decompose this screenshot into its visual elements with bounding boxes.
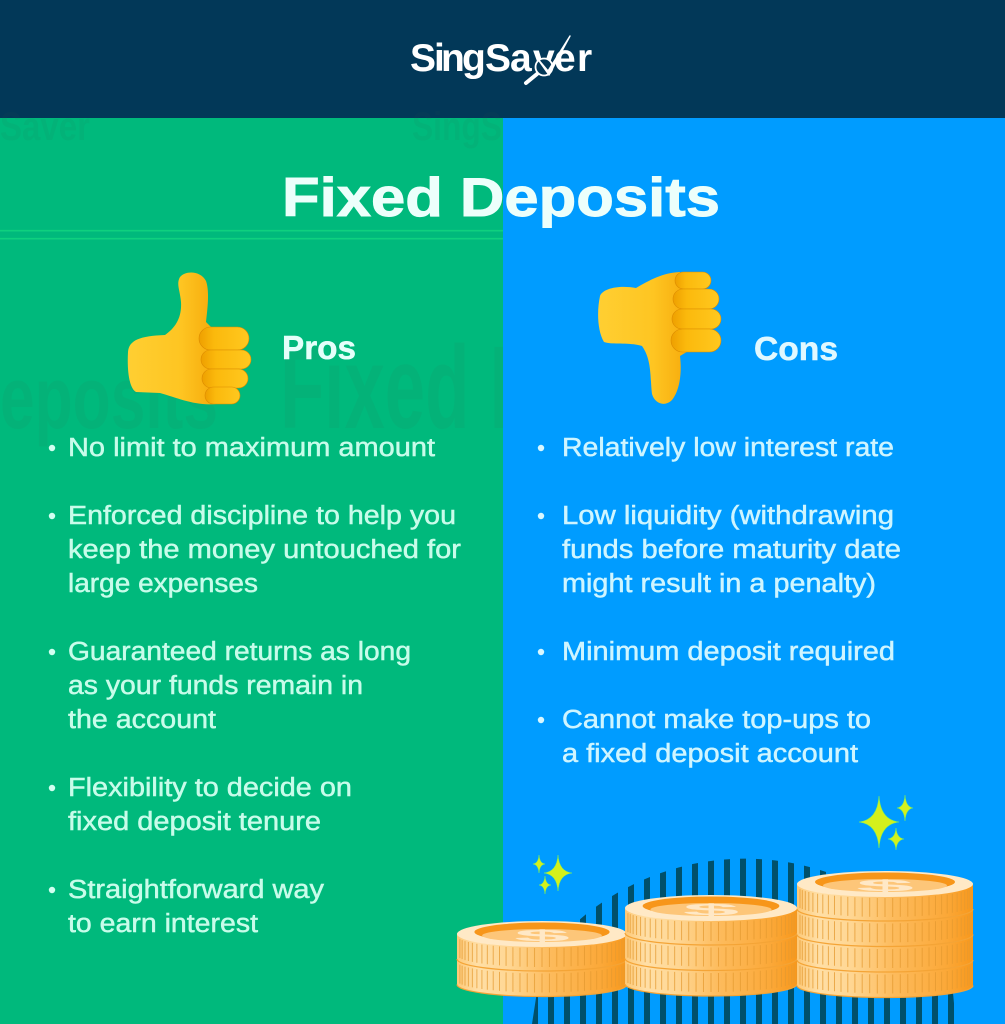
background: cons panel [503, 118, 1005, 1024]
pro item: enforced discipline: Enforced discipline to help you [68, 502, 456, 530]
pro item: flexibility: Flexibility to decide on [68, 774, 352, 802]
icon: magnifier with check mark [526, 36, 570, 83]
text: eposits [0, 348, 218, 447]
icon: thumbs down [598, 272, 721, 404]
background: pros panel [0, 118, 503, 1024]
title: Fixed Deposits [282, 166, 720, 228]
striped arch behind coins [532, 859, 956, 1024]
pro item: flexibility: fixed deposit tenure [68, 808, 321, 836]
list: cons [538, 434, 901, 768]
pro item: guaranteed returns [49, 638, 411, 734]
con item: low liquidity: Low liquidity (withdrawing [562, 502, 894, 530]
list: pros [49, 434, 462, 938]
coin stack: middle: $ [683, 901, 739, 918]
pro item: no limit: No limit to maximum amount [68, 434, 435, 462]
con item: low liquidity: might result in a penalty) [562, 570, 876, 598]
con item: low interest: Relatively low interest rate [562, 434, 894, 462]
header bar [0, 0, 1005, 118]
icon: sparkles right [859, 795, 913, 850]
icon: sparkles left [533, 855, 572, 894]
coin stack: right: $ [856, 877, 914, 894]
heading: Cons: Cons [754, 330, 838, 367]
coin stack: middle [625, 895, 797, 996]
con item: low liquidity [538, 502, 901, 598]
text: Fixed D [280, 322, 542, 454]
pro item: straightforward: Straightforward way [68, 876, 324, 904]
con item: no top-ups: Cannot make top-ups to [562, 706, 871, 734]
pro item: enforced discipline: large expenses [68, 570, 258, 598]
pro item: enforced discipline: keep the money untouched for [68, 536, 462, 564]
text: Saver [0, 105, 90, 149]
con item: low liquidity: funds before maturity date [562, 536, 901, 564]
pro item: guaranteed returns: the account [68, 706, 216, 734]
pro item: guaranteed returns: as your funds remain in [68, 672, 363, 700]
icon: thumbs up [128, 272, 251, 404]
coin stack: left [457, 921, 627, 996]
con item: no top-ups [538, 706, 871, 768]
coin stack: right [797, 871, 973, 998]
text: SingS [412, 105, 502, 149]
logo: SingSaver: SingSaver [410, 37, 592, 80]
pro item: guaranteed returns: Guaranteed returns as long [68, 638, 411, 666]
pro item: straightforward: to earn interest [68, 910, 258, 938]
coin stack: left: $ [514, 927, 570, 944]
con item: minimum deposit: Minimum deposit required [562, 638, 895, 666]
heading: Pros: Pros [282, 329, 356, 366]
pro item: enforced discipline [49, 502, 462, 598]
pro item: straightforward [49, 876, 324, 938]
pro item: flexibility [49, 774, 352, 836]
con item: no top-ups: a fixed deposit account [562, 740, 858, 768]
